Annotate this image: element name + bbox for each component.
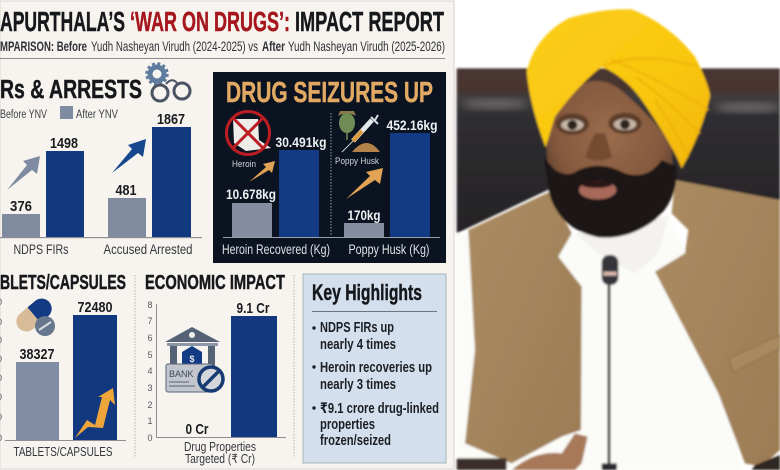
panel: FIRs and arrests bbox=[0, 64, 202, 257]
bar chart: poppy husk: 170kg bbox=[348, 207, 380, 223]
heading: Key Highlights bbox=[312, 280, 422, 305]
bullet: FIRs bbox=[312, 320, 396, 353]
arrow: poppy husk increase bbox=[346, 168, 383, 199]
icon: bank frozen: $ bbox=[189, 354, 195, 364]
arrow: gray increase bbox=[7, 156, 40, 190]
heading: Rs & ARRESTS bbox=[0, 76, 142, 104]
bar chart: accused arrested bbox=[104, 111, 192, 257]
bar chart: heroin recovered bbox=[222, 134, 330, 257]
chart axis: 1 bbox=[147, 416, 153, 426]
panel: drug seizures bbox=[213, 72, 446, 263]
photo detail: face bbox=[547, 81, 672, 213]
heading: BLETS/CAPSULES bbox=[0, 271, 126, 294]
icon: poppy and syringe bbox=[335, 111, 380, 167]
icon: bank frozen: BANK bbox=[169, 369, 194, 379]
heading: DRUG SEIZURES UP bbox=[226, 77, 433, 109]
photo detail: nose bbox=[586, 133, 612, 160]
bullet: properties: ₹9.1 crore drug-linked bbox=[320, 401, 439, 417]
icon: heroin crossed out: Heroin bbox=[232, 159, 256, 170]
photo detail: brown vest right bbox=[655, 180, 780, 467]
subtitle: MPARISON: Before bbox=[0, 38, 87, 54]
bar chart: drug properties: Drug Properties bbox=[184, 440, 256, 454]
bar chart: tablets bbox=[5, 299, 126, 459]
chart axis clipped labels bbox=[0, 297, 2, 443]
photo detail: hand bbox=[512, 433, 588, 470]
bullet: FIRs: NDPS FIRs up bbox=[320, 320, 394, 336]
bar chart: NDPS FIRs: NDPS FIRs bbox=[14, 241, 68, 257]
photo detail: microphone bbox=[604, 283, 613, 465]
photo detail: beard bbox=[543, 157, 677, 238]
bullet: properties bbox=[312, 401, 439, 449]
photo detail: mouth bbox=[579, 181, 616, 199]
bar chart: poppy husk: Poppy Husk (Kg) bbox=[348, 242, 430, 257]
subtitle: After bbox=[262, 38, 285, 54]
bar chart: drug properties: 9.1 Cr bbox=[236, 300, 270, 317]
bar chart: drug properties: 0 Cr bbox=[186, 421, 209, 438]
bar chart: NDPS FIRs bbox=[2, 135, 84, 257]
subtitle: Yudh Nasheyan Virudh (2025-2026) bbox=[288, 38, 445, 54]
photo detail: eyes bbox=[561, 119, 584, 131]
legend: Before YNV bbox=[0, 109, 47, 121]
bar chart: heroin recovered: 10.678kg bbox=[226, 186, 276, 202]
chart axis: 8 bbox=[147, 300, 153, 310]
title: IMPACT REPORT bbox=[295, 6, 444, 37]
bar chart: NDPS FIRs: 1498 bbox=[50, 135, 78, 152]
bullet: heroin bbox=[312, 360, 432, 393]
photo detail: eye sockets and brows bbox=[556, 113, 589, 135]
bullet: properties: frozen/seized bbox=[320, 433, 391, 449]
photo detail: leather chair bbox=[457, 68, 780, 233]
bar chart: tablets: 38327 bbox=[20, 346, 54, 363]
chart axis: 6 bbox=[147, 333, 153, 343]
bullet: properties: properties bbox=[320, 417, 375, 433]
arrow: blue increase bbox=[112, 139, 146, 173]
bar chart: heroin recovered: 30.491kg bbox=[276, 134, 326, 150]
chart axis: 3 bbox=[147, 383, 153, 393]
title bbox=[0, 6, 444, 37]
bar chart: accused arrested: 1867 bbox=[157, 111, 185, 128]
icon: gear and handcuffs bbox=[146, 64, 190, 101]
arrow: orange zigzag growth bbox=[75, 388, 115, 438]
chart axis: 5 bbox=[147, 350, 153, 360]
chart axis: 4 bbox=[147, 366, 153, 376]
chart axis: 2 bbox=[147, 400, 153, 410]
photo: speaker in yellow turban at microphone bbox=[457, 0, 780, 470]
bar chart: accused arrested: Accused Arrested bbox=[104, 241, 192, 257]
bar chart: heroin recovered: Heroin Recovered (Kg) bbox=[222, 242, 330, 257]
photo detail: neck bbox=[575, 217, 668, 273]
header bbox=[0, 6, 445, 59]
bar chart: drug properties bbox=[184, 300, 277, 466]
icon: pills bbox=[12, 294, 56, 336]
arrow: heroin increase bbox=[249, 161, 275, 182]
bar chart: poppy husk bbox=[344, 117, 438, 257]
chart axis: 0 bbox=[147, 433, 153, 443]
bar chart: poppy husk: 452.16kg bbox=[386, 117, 438, 133]
infographic panel background bbox=[0, 1, 454, 469]
panel: tablets and capsules bbox=[0, 271, 126, 459]
photo detail: brown vest left bbox=[465, 192, 582, 463]
bar chart: tablets: 72480 bbox=[78, 299, 112, 316]
title: APURTHALA’S bbox=[0, 6, 125, 37]
panel: economic impact bbox=[145, 271, 286, 466]
heading: ECONOMIC IMPACT bbox=[145, 271, 285, 294]
legend bbox=[0, 106, 118, 121]
bullet: FIRs: nearly 4 times bbox=[320, 337, 396, 353]
legend: After YNV bbox=[76, 109, 118, 121]
bar chart: tablets: TABLETS/CAPSULES bbox=[14, 444, 113, 459]
chart axis: 7 bbox=[147, 316, 153, 326]
bar chart: NDPS FIRs: 376 bbox=[10, 198, 32, 215]
bullet: heroin: nearly 3 times bbox=[320, 377, 396, 393]
subtitle bbox=[0, 38, 445, 54]
photo detail: yellow turban bbox=[527, 9, 710, 168]
photo detail: white shirt bbox=[457, 213, 742, 470]
bullet: heroin: Heroin recoveries up bbox=[320, 360, 432, 376]
icon: poppy and syringe: Poppy Husk bbox=[335, 156, 379, 167]
panel: key highlights bbox=[303, 274, 446, 463]
icon: bank frozen bbox=[165, 327, 223, 392]
title: ‘WAR ON DRUGS’: bbox=[130, 6, 290, 37]
bar chart: drug properties: Targeted (₹ Cr) bbox=[185, 452, 255, 466]
icon: heroin crossed out bbox=[226, 112, 271, 170]
chart axis bbox=[147, 300, 286, 443]
subtitle: Yudh Nasheyan Virudh (2024-2025) vs bbox=[91, 38, 258, 54]
bar chart: accused arrested: 481 bbox=[116, 182, 136, 199]
